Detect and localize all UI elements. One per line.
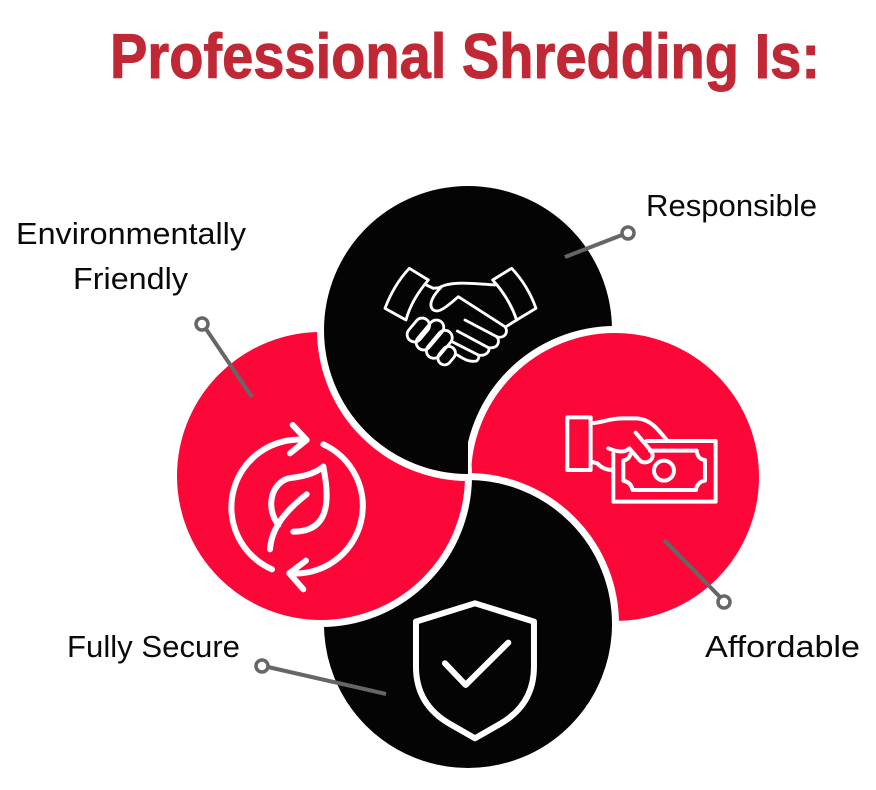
leader: responsible — [565, 227, 634, 257]
circle: fully secure — [320, 476, 616, 772]
label: environmentally friendly — [16, 216, 247, 296]
icon: hand with money — [567, 417, 716, 502]
leader: fully secure — [256, 660, 386, 694]
leader: affordable — [664, 540, 730, 608]
label: environmentally friendly: Friendly — [73, 261, 189, 296]
icon: shield with check — [416, 603, 534, 738]
icon: handshake — [385, 268, 536, 368]
overlap: responsible over environmentally friendly — [317, 316, 468, 481]
pinwheel diagram — [174, 182, 762, 772]
circle: affordable — [468, 330, 762, 624]
label: responsible: Responsible — [646, 188, 817, 223]
leader: environmentally friendly — [196, 318, 252, 397]
circle: responsible — [324, 186, 612, 474]
icon: recycle leaf — [231, 425, 363, 589]
label: fully secure: Fully Secure — [67, 629, 240, 664]
circle: environmentally friendly — [174, 328, 468, 624]
label: environmentally friendly: Environmentally — [16, 216, 247, 251]
label: affordable: Affordable — [705, 629, 860, 664]
